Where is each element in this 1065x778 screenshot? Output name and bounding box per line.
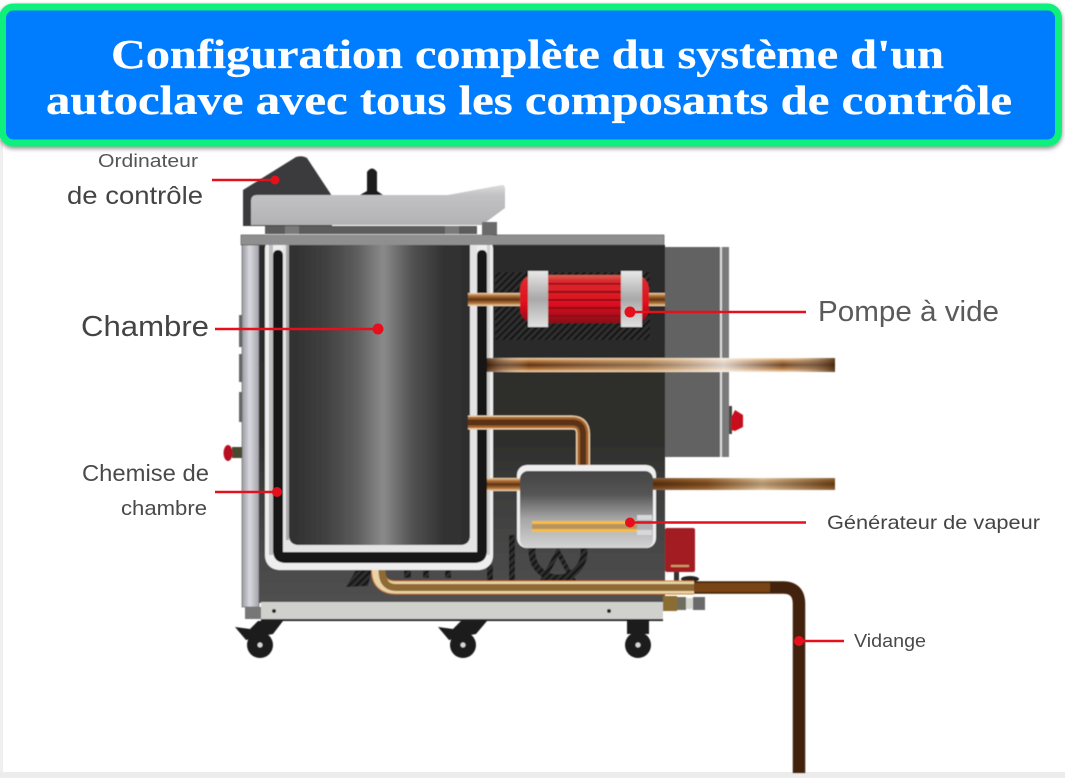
callout: drain [794,636,844,646]
generator inlet pipe [487,478,520,491]
label: Vidange: Vidange [854,631,926,651]
label: Chemise de: Chemise de [82,460,209,486]
left silver column [242,245,259,607]
emergency button left [224,445,242,461]
callout: steam generator [625,518,806,528]
top bar [241,235,664,245]
label: Pompe à vide: Pompe à vide [818,296,999,328]
steam generator [517,465,656,548]
title line 2: autoclave avec tous les composants de contrôle [46,77,1012,123]
red box [665,528,695,572]
generator outlet pipe [653,478,835,490]
elbow copper pipe [468,422,583,472]
callout: chamber [215,324,384,334]
hinge strip [265,226,477,234]
chamber jacket [265,235,493,570]
label: chambre: chambre [121,497,207,520]
label: de contrôle: de contrôle [67,182,203,210]
label: Chambre: Chambre [81,311,209,343]
long copper pipe [487,358,835,372]
control computer housing [243,156,332,226]
callout: chamber jacket [215,487,282,497]
emergency button right [729,406,743,434]
hatch logo marks [346,526,584,587]
top knob [360,168,383,195]
callout: vacuum pump [624,306,806,318]
vacuum pump [520,271,649,327]
title line 1: Configuration complète du système d'un [111,31,944,77]
side panel [665,247,720,457]
copper pipe to vacuum pump [468,293,520,306]
title banner [2,7,1058,143]
label: Ordinateur: Ordinateur [98,151,198,171]
drain pipe [378,570,799,773]
caster left [235,621,283,658]
bottom rail [261,602,663,619]
autoclave machine illustration [224,156,835,773]
caster right [625,620,651,658]
callout: control computer [212,176,280,184]
caster middle [438,621,487,658]
side handles [239,315,242,422]
machine body [259,245,665,603]
valves [663,572,705,611]
chamber [283,245,477,552]
label: Générateur de vapeur: Générateur de vapeur [827,512,1041,534]
lid [251,185,505,225]
callout lines and dots [212,176,844,646]
vacuum pump hatch [495,272,650,340]
